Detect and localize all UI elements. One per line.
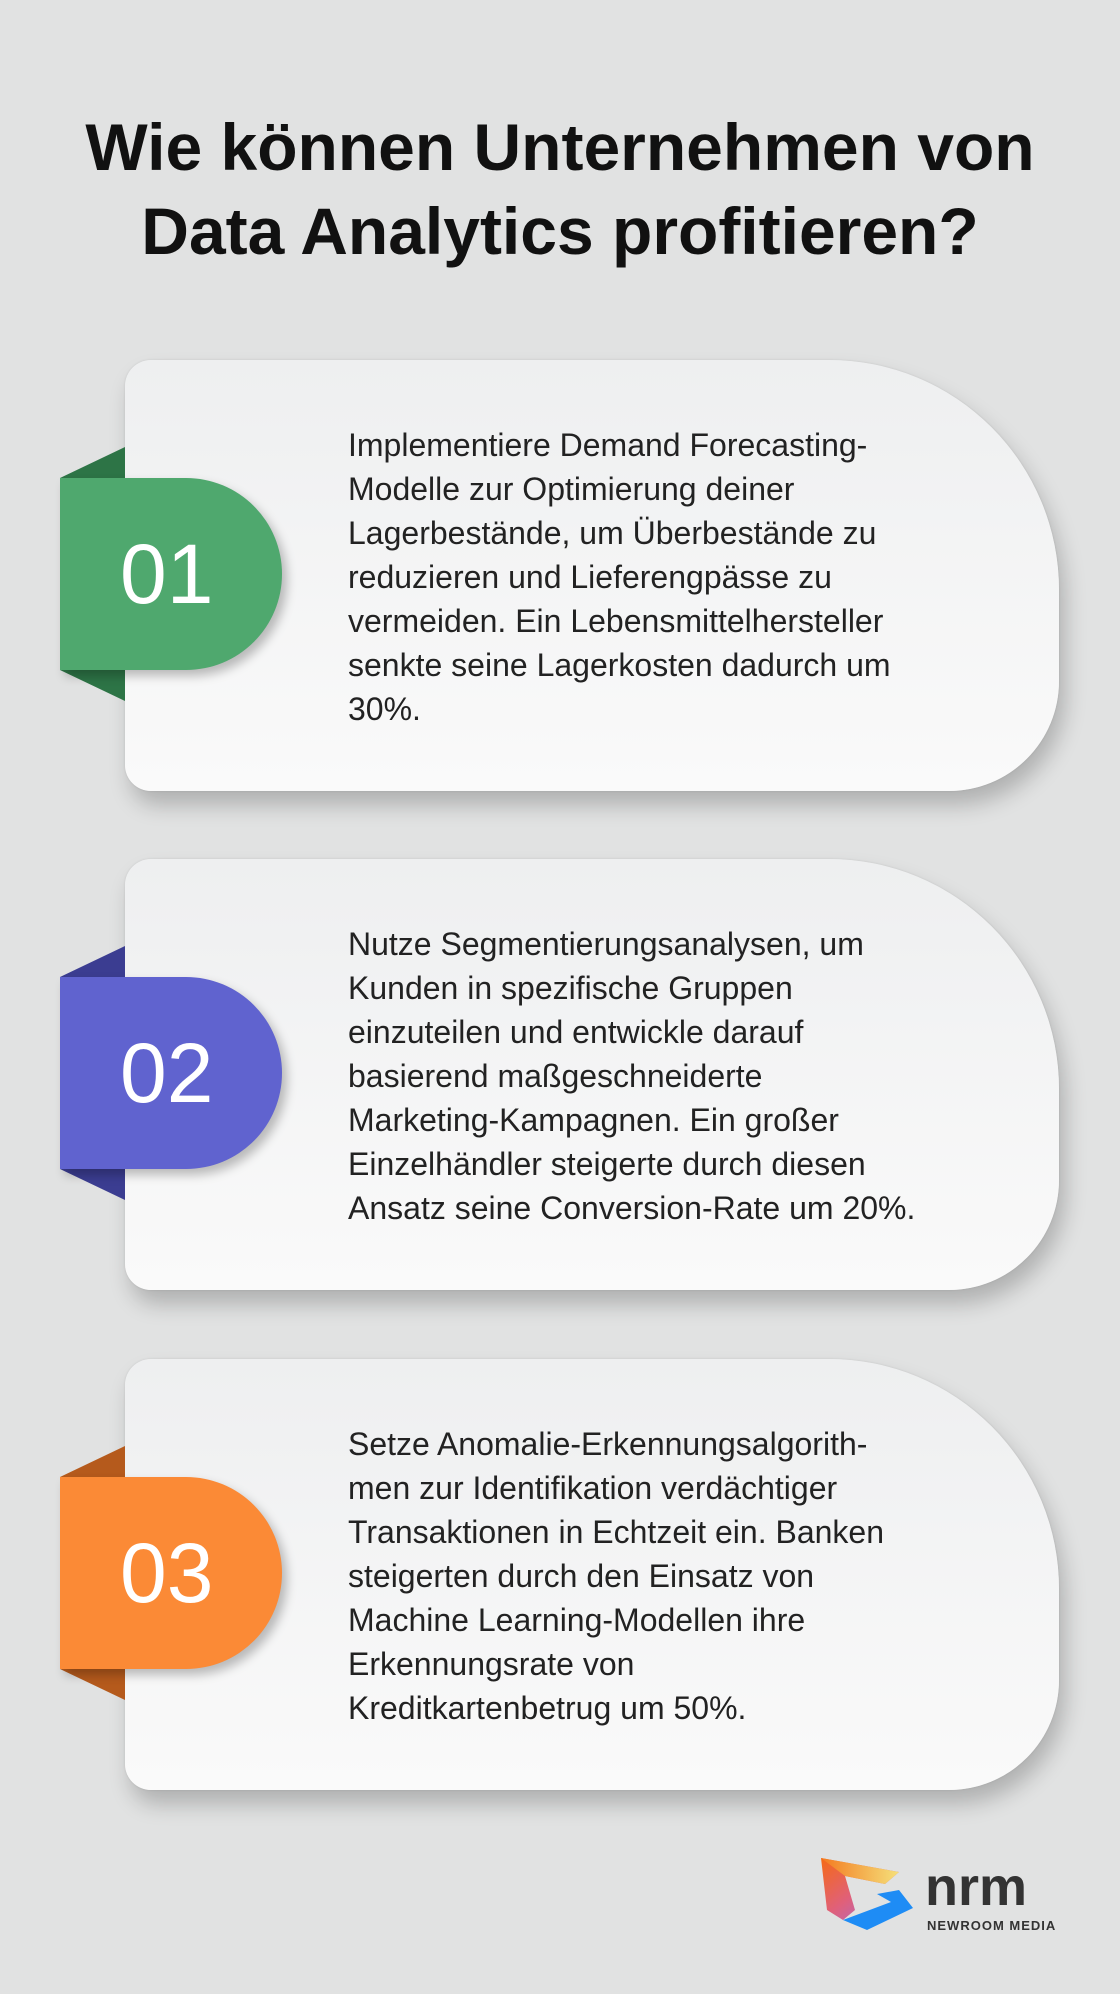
text block 3: Setze Anomalie-Erkennungsalgorith-: [348, 1426, 867, 1462]
logo text: [925, 1857, 1056, 1933]
text block 2: Einzelhändler steigerte durch diesen: [348, 1146, 866, 1182]
panel: card 3: [125, 1359, 1059, 1790]
text block 3: men zur Identifikation verdächtiger: [348, 1470, 837, 1506]
text block 2: basierend maßgeschneiderte: [348, 1058, 762, 1094]
text block 1: Implementiere Demand Forecasting-: [348, 427, 867, 463]
text block 2: [348, 926, 915, 1226]
fold top 1: [60, 447, 125, 478]
text block 2: Nutze Segmentierungsanalysen, um: [348, 926, 864, 962]
fold top 3: [60, 1446, 125, 1477]
text block 1: Modelle zur Optimierung deiner: [348, 471, 794, 507]
logo text: nrm: [925, 1857, 1027, 1917]
logo text: NEWROOM MEDIA: [927, 1918, 1056, 1933]
logo: [821, 1857, 1056, 1933]
text block 3: Machine Learning-Modellen ihre: [348, 1602, 805, 1638]
number tab 01: [60, 478, 282, 670]
title: Wie können Unternehmen von: [85, 110, 1035, 184]
title: Data Analytics profitieren?: [141, 194, 979, 268]
fold bottom 3: [60, 1669, 125, 1700]
title: [85, 110, 1035, 268]
text block 1: reduzieren und Lieferengpässe zu: [348, 559, 832, 595]
number tab 03: [60, 1477, 282, 1669]
text block 1: 30%.: [348, 691, 421, 727]
fold bottom 2: [60, 1169, 125, 1200]
number tab 01: 01: [120, 527, 213, 621]
text block 3: steigerten durch den Einsatz von: [348, 1558, 814, 1594]
icon: logo mark: [821, 1858, 913, 1930]
number tab 03: 03: [120, 1526, 213, 1620]
text block 1: [348, 427, 891, 727]
panel: card 2: [125, 859, 1059, 1290]
number tab 02: [60, 977, 282, 1169]
text block 1: vermeiden. Ein Lebensmittelhersteller: [348, 603, 883, 639]
text block 1: senkte seine Lagerkosten dadurch um: [348, 647, 891, 683]
fold top 2: [60, 946, 125, 977]
text block 2: einzuteilen und entwickle darauf: [348, 1014, 803, 1050]
text block 3: Transaktionen in Echtzeit ein. Banken: [348, 1514, 884, 1550]
text block 2: Marketing-Kampagnen. Ein großer: [348, 1102, 839, 1138]
text block 2: Ansatz seine Conversion-Rate um 20%.: [348, 1190, 915, 1226]
text block 3: Kreditkartenbetrug um 50%.: [348, 1690, 746, 1726]
panel: card 1: [125, 360, 1059, 791]
text block 1: Lagerbestände, um Überbestände zu: [348, 515, 876, 551]
number tab 02: 02: [120, 1026, 213, 1120]
text block 3: [348, 1426, 884, 1726]
text block 3: Erkennungsrate von: [348, 1646, 634, 1682]
fold bottom 1: [60, 670, 125, 701]
text block 2: Kunden in spezifische Gruppen: [348, 970, 793, 1006]
